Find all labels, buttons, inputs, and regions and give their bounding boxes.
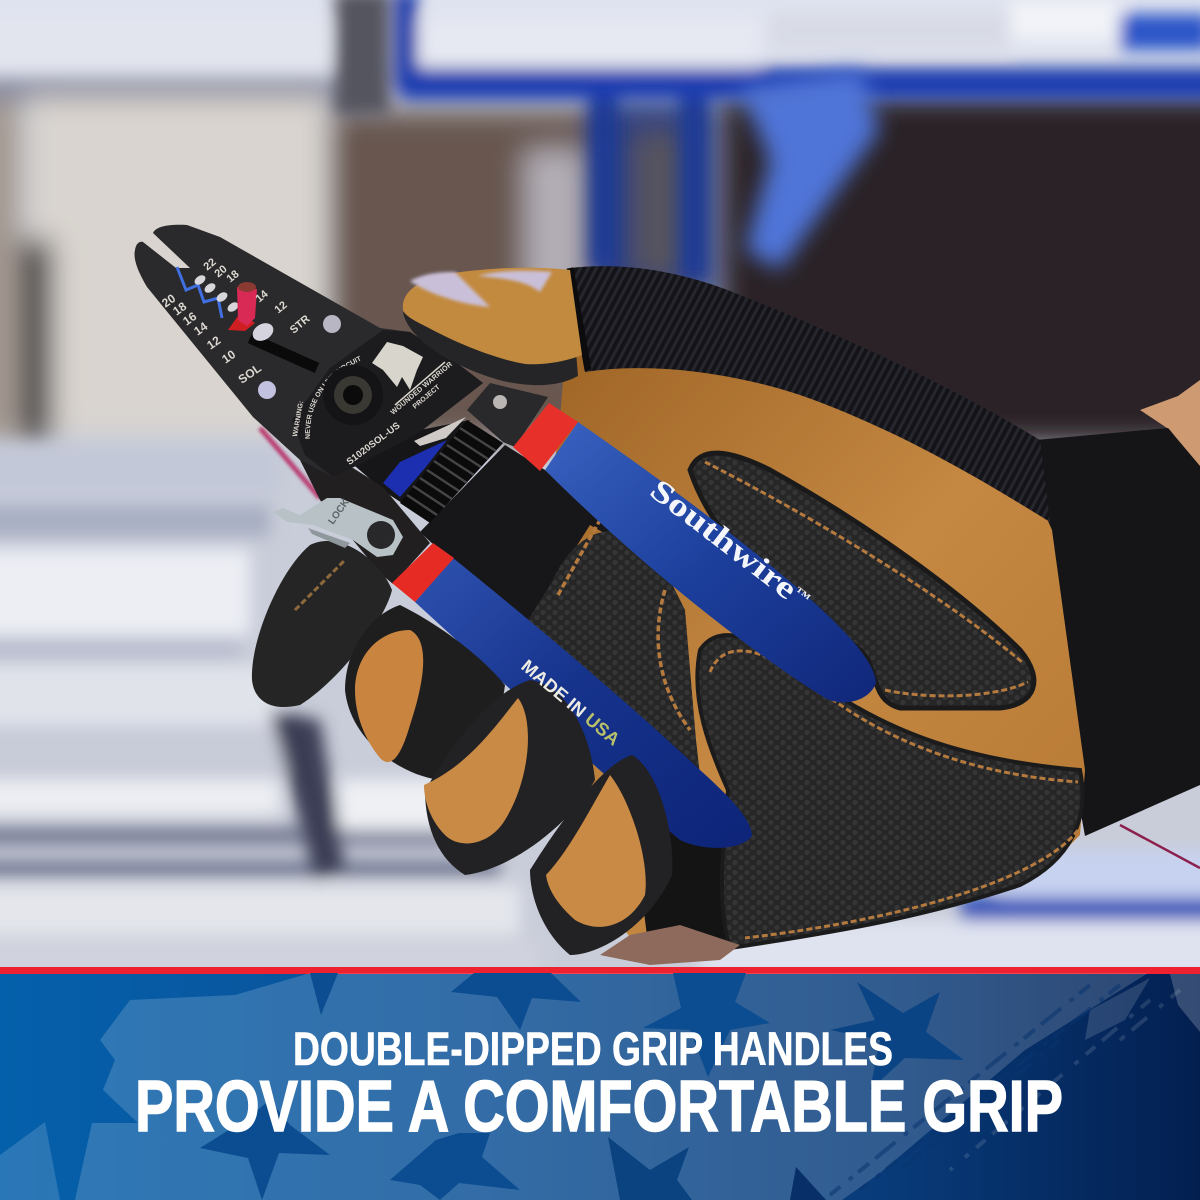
index fingertip xyxy=(252,541,392,707)
jaws outline xyxy=(134,225,483,477)
banner background xyxy=(0,974,1200,1200)
lower palm grip pad xyxy=(697,635,1082,948)
thumb rim xyxy=(403,312,578,385)
red wire end xyxy=(228,313,255,331)
gauge markings: PROJECT xyxy=(412,383,442,411)
gauge markings: 16 xyxy=(180,309,199,328)
distressed flag brush texture xyxy=(0,973,1200,1200)
banner stars xyxy=(200,973,964,1200)
gripping fingers xyxy=(252,541,740,965)
black fold behind the handles xyxy=(420,445,625,630)
gauge markings: 18 xyxy=(225,268,242,285)
gauge markings: 20 xyxy=(213,263,230,280)
red upper grip collar xyxy=(513,403,578,471)
upper arm of the tool xyxy=(467,383,548,447)
heading line one: DOUBLE-DIPPED GRIP HANDLES xyxy=(293,1022,893,1075)
glove cuff xyxy=(1036,428,1200,836)
gauge markings: STR xyxy=(288,313,312,336)
plier head xyxy=(134,224,483,476)
Southwire logo: Southwire xyxy=(644,472,773,582)
blue upper handle grip xyxy=(545,422,876,702)
upper palm grip pad xyxy=(690,453,1034,708)
gauge markings: 14 xyxy=(254,288,271,305)
slot and holes xyxy=(250,338,317,368)
gauge markings: NEVER USE ON LIVE CIRCUITS xyxy=(305,356,360,439)
return spring xyxy=(400,420,503,523)
Wounded Warrior silhouette xyxy=(372,342,423,390)
glove back in tan suede xyxy=(538,350,1085,950)
gauge markings: 12 xyxy=(273,299,290,316)
middle finger xyxy=(345,605,505,780)
gauge markings: 18 xyxy=(170,299,189,318)
gauge markings: 10 xyxy=(219,347,238,366)
glove palm and cuff xyxy=(420,266,1200,960)
centre palm hex pad xyxy=(525,531,700,775)
gauge markings: S1020SOL-US xyxy=(345,420,402,468)
pliers arms, spring and handles xyxy=(260,383,876,848)
gauge markings: WOUNDED WARRIOR xyxy=(389,359,455,417)
shadow between palm and little finger xyxy=(640,730,730,960)
pink wire streak xyxy=(260,428,320,498)
blue lower handle grip xyxy=(415,558,752,848)
blue glove fabric xyxy=(383,440,447,497)
bottom banner xyxy=(0,967,1200,1200)
gauge markings xyxy=(159,256,455,468)
thumb highlights xyxy=(410,271,552,307)
red lower grip collar xyxy=(392,543,454,602)
ring finger xyxy=(425,680,595,875)
gauge markings: 14 xyxy=(191,319,210,338)
thumb suede xyxy=(403,268,582,364)
gauge markings: WARNING: xyxy=(292,401,305,437)
little finger xyxy=(530,755,672,955)
gauge markings: SOL xyxy=(236,361,264,387)
gauge markings: 20 xyxy=(159,291,178,310)
gauge markings: 22 xyxy=(202,256,219,273)
thumb xyxy=(403,268,582,385)
wrist skin xyxy=(1140,380,1200,470)
stripping notches xyxy=(177,267,222,318)
Southwire logo: ™ xyxy=(791,583,814,605)
red divider line xyxy=(0,967,1200,974)
lock latch xyxy=(273,497,403,557)
lower arm of the tool xyxy=(300,460,430,584)
lock latch: LOCK xyxy=(326,497,352,527)
black mesh knuckle band xyxy=(570,266,1050,522)
pivot bolt xyxy=(323,365,383,425)
gauge markings: 12 xyxy=(204,333,223,352)
dark backing behind spring xyxy=(355,420,470,505)
pivot plate xyxy=(292,330,483,477)
made in USA imprint: MADE IN USA xyxy=(517,656,624,749)
